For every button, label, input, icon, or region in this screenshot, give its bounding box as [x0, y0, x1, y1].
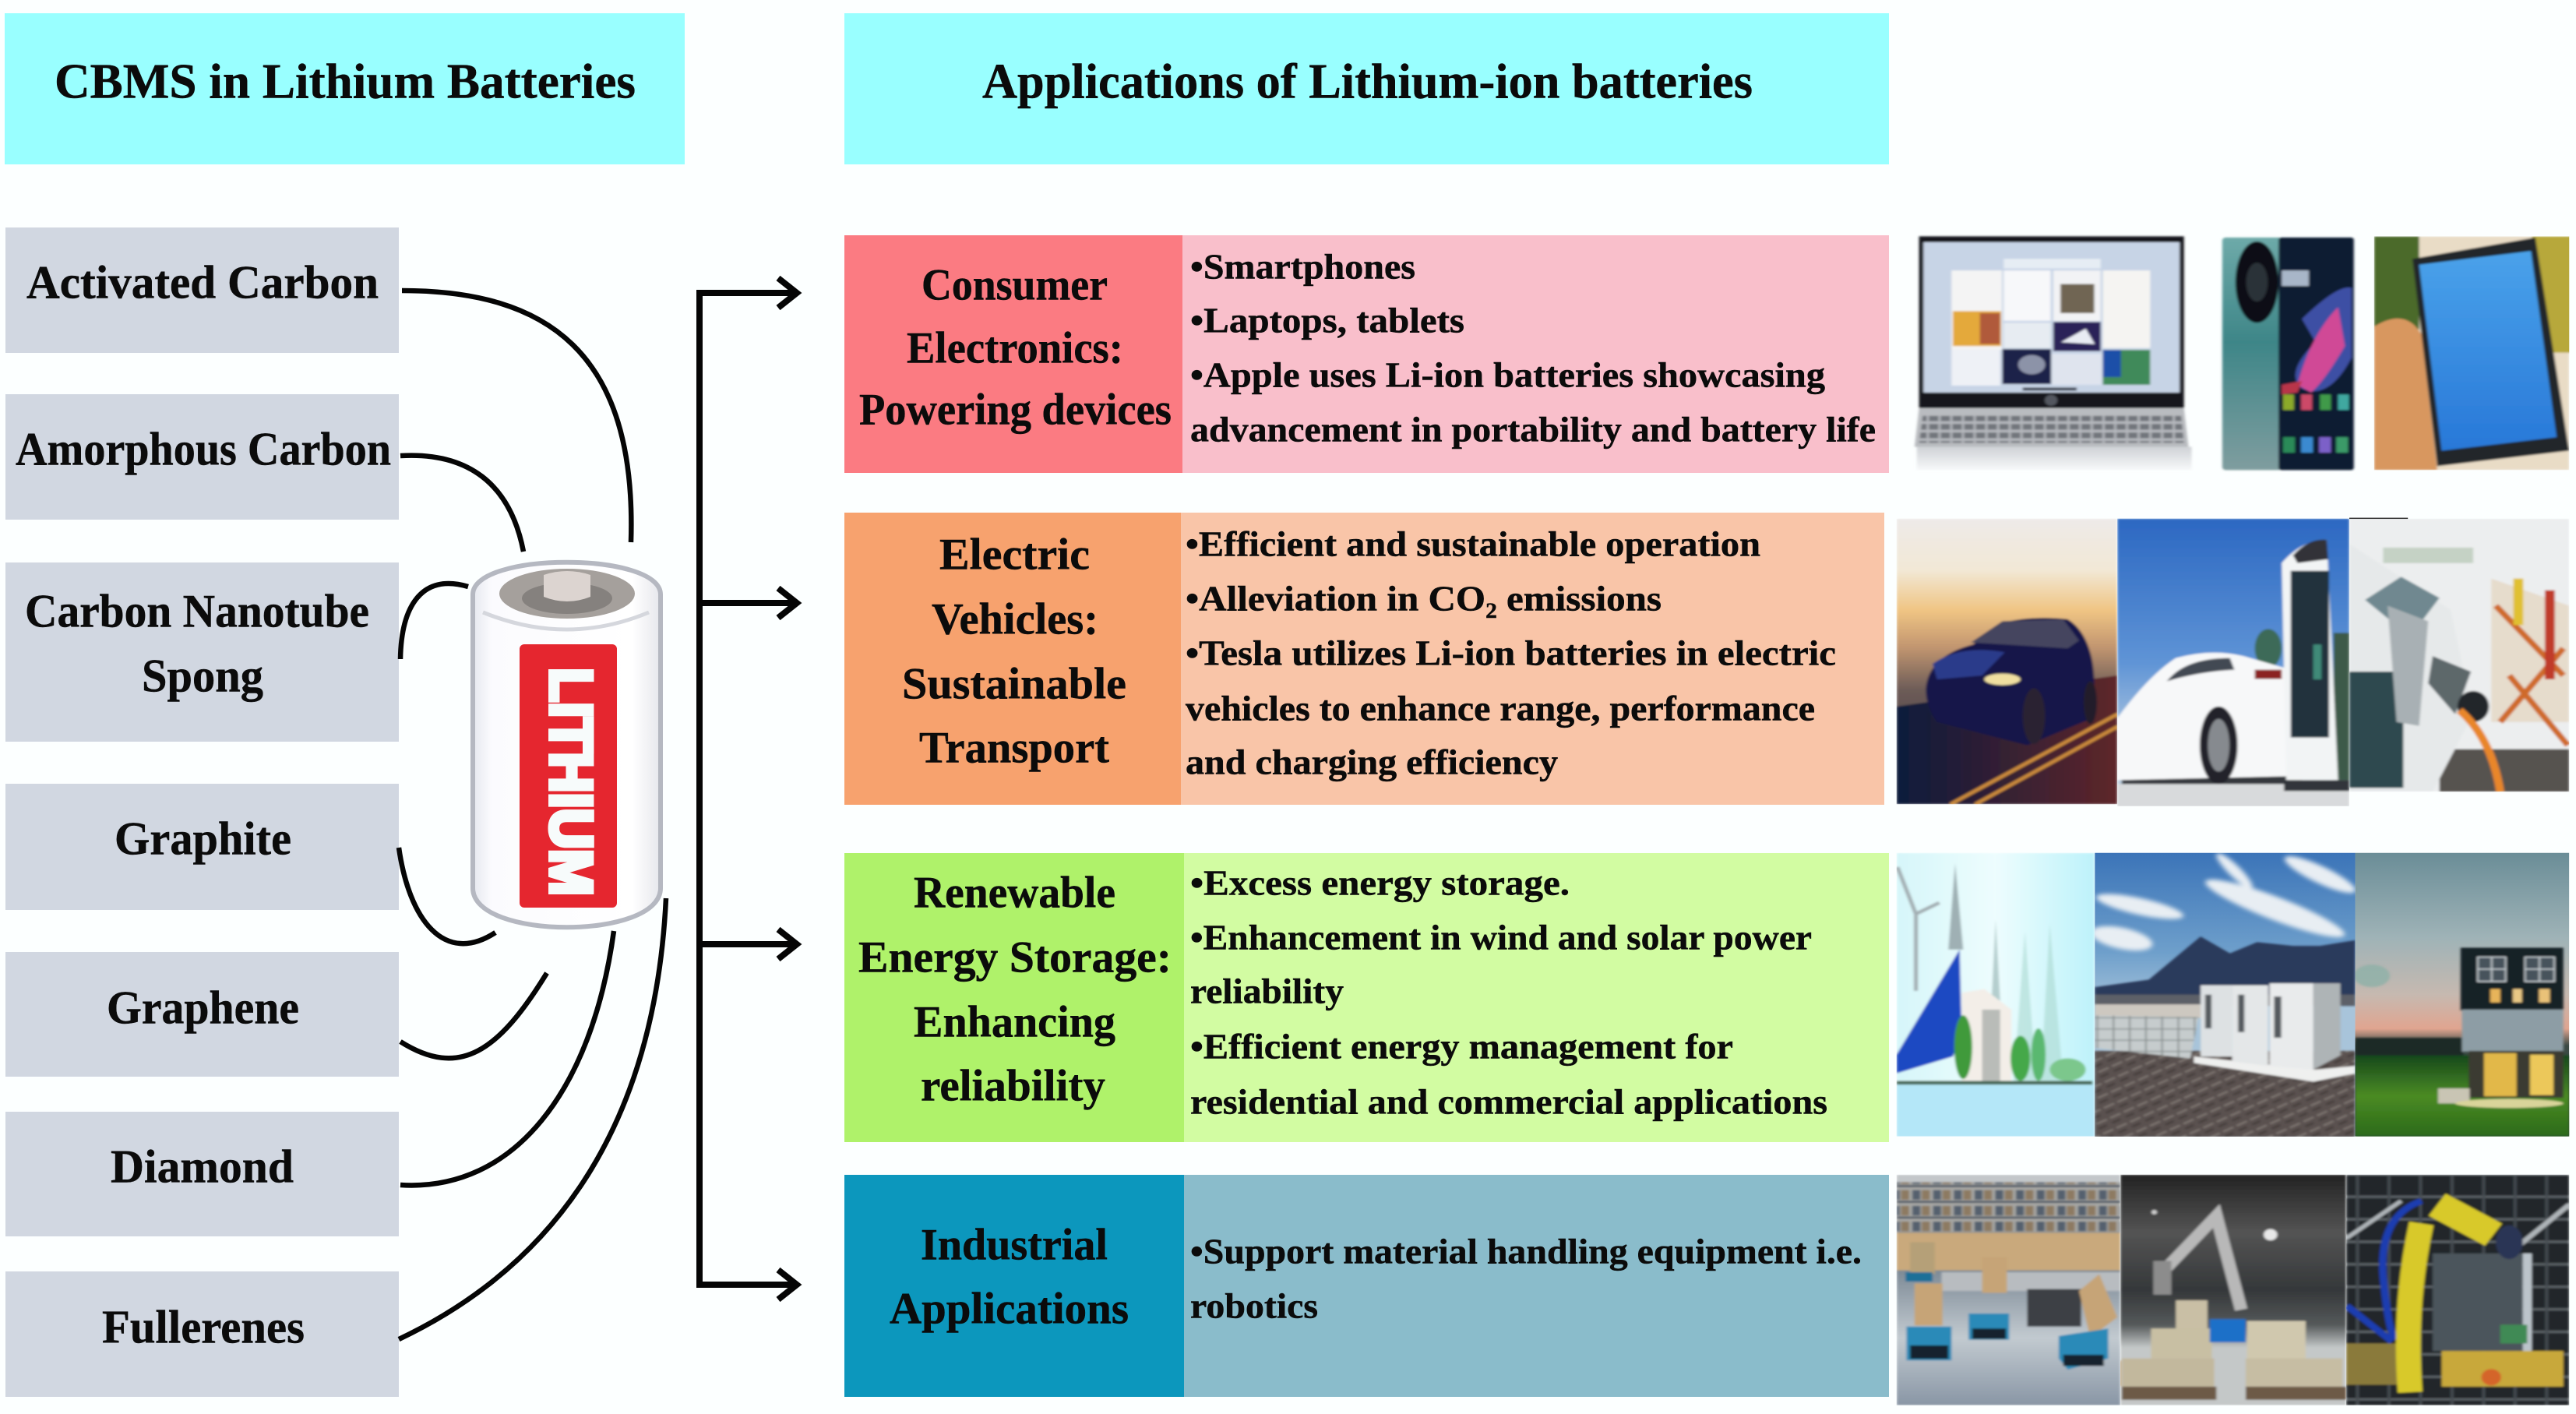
bullet list: renewable energy storage: •Excess energy storage. — [1190, 863, 1570, 902]
bullet list: renewable energy storage: •Efficient energy management for — [1190, 1027, 1733, 1066]
heading: industrial applications — [890, 1220, 1129, 1334]
material: Amorphous Carbon — [5, 394, 399, 520]
heading: electric vehicles: Transport — [919, 723, 1109, 773]
image: laptop — [1915, 236, 2192, 470]
heading: consumer electronics: Powering devices — [859, 385, 1172, 435]
material: Graphite — [5, 784, 399, 910]
bullet list: consumer electronics: •Laptops, tablets — [1190, 301, 1464, 340]
image: EV charging plug — [2349, 519, 2569, 792]
bullet list: electric vehicles: •Efficient and sustainable operation — [1186, 524, 1760, 564]
heading: electric vehicles: Vehicles: — [932, 595, 1098, 644]
heading: consumer electronics — [859, 260, 1172, 435]
material: Graphene — [5, 952, 399, 1077]
arrows: branching to application panels — [700, 278, 797, 1299]
bullet list: consumer electronics: •Smartphones — [1190, 246, 1415, 287]
material: Carbon Nanotube Spong: Carbon Nanotube — [25, 586, 369, 637]
decorative top edge line — [2349, 518, 2408, 519]
bullet list: renewable energy storage: residential and commercial applications — [1190, 1081, 1827, 1122]
panel: carbon material list — [5, 227, 399, 1397]
image: white car at charging station — [2117, 519, 2349, 807]
material: Diamond: Diamond — [111, 1141, 294, 1192]
header: Applications of Lithium-ion batteries — [844, 13, 1889, 164]
photo group: lower rows — [1897, 850, 2569, 1405]
heading: electric vehicles — [902, 530, 1126, 773]
bullet list: electric vehicles: and charging efficiency — [1186, 742, 1558, 782]
header: CBMS in Lithium Batteries: CBMS in Lithium Batteries — [55, 53, 636, 109]
icon: lithium battery: LITHIUM — [537, 668, 604, 896]
bullet list: renewable energy storage: reliability — [1190, 971, 1344, 1011]
bullet list: electric vehicles: vehicles to enhance range, performance — [1186, 689, 1815, 728]
material: Activated Carbon: Activated Carbon — [26, 257, 379, 309]
panel: renewable energy storage — [844, 853, 1889, 1142]
bullet list: consumer electronics — [1190, 246, 1876, 449]
panel: industrial applications — [844, 1175, 1889, 1397]
image: wind and solar grid illustration — [1897, 853, 2095, 1137]
heading: industrial applications: Applications — [890, 1284, 1129, 1334]
material: Graphite: Graphite — [115, 813, 291, 865]
photo group: upper rows — [1897, 236, 2572, 807]
panel: electric vehicles — [844, 513, 1884, 805]
material: Fullerenes — [5, 1271, 399, 1397]
material: Graphene: Graphene — [107, 982, 299, 1033]
heading: renewable energy storage: Enhancing — [914, 997, 1115, 1047]
heading: consumer electronics: Consumer — [922, 260, 1108, 310]
bullet list: renewable energy storage: •Enhancement in wind and solar power — [1190, 918, 1812, 957]
image: tablet held in hand — [2374, 236, 2572, 470]
bullet list: industrial applications: •Support material handling equipment i.e. — [1190, 1231, 1862, 1271]
bullet list: electric vehicles — [1186, 524, 1836, 782]
material: Carbon Nanotube Spong: Spong — [142, 650, 263, 701]
bullet list: electric vehicles: •Tesla utilizes Li-ion batteries in electric — [1186, 633, 1836, 673]
connector curves from materials to battery — [399, 291, 666, 1339]
material: Carbon Nanotube Spong — [5, 562, 399, 742]
bullet list: consumer electronics: advancement in portability and battery life — [1190, 410, 1876, 449]
heading: consumer electronics: Electronics: — [907, 324, 1123, 372]
header: CBMS in Lithium Batteries — [5, 13, 685, 164]
image: solar house at dusk — [2354, 853, 2569, 1137]
panel: consumer electronics — [844, 235, 1889, 473]
bullet list: industrial applications — [1190, 1231, 1862, 1326]
heading: industrial applications: Industrial — [921, 1220, 1108, 1270]
heading: electric vehicles: Sustainable — [902, 659, 1126, 709]
material: Fullerenes: Fullerenes — [102, 1301, 305, 1352]
material: Amorphous Carbon: Amorphous Carbon — [16, 424, 391, 475]
icon: lithium battery — [473, 562, 661, 927]
bullet list: renewable energy storage — [1190, 863, 1827, 1122]
header: Applications of Lithium-ion batteries: Applications of Lithium-ion batteries — [982, 53, 1753, 109]
image: yellow industrial robot arm — [2346, 1175, 2569, 1405]
material: Diamond — [5, 1112, 399, 1236]
image: palletizing robot arm — [2120, 1175, 2346, 1405]
bullet list: electric vehicles: •Alleviation in CO₂ emissions — [1186, 578, 1662, 619]
image: battery storage with mountains — [2088, 850, 2360, 1137]
image: smartphone — [2222, 238, 2354, 470]
heading: renewable energy storage: reliability — [921, 1061, 1105, 1111]
bullet list: consumer electronics: •Apple uses Li-ion batteries showcasing — [1190, 355, 1825, 394]
bullet list: industrial applications: robotics — [1190, 1285, 1318, 1326]
material: Activated Carbon — [5, 227, 399, 353]
heading: renewable energy storage: Renewable — [914, 868, 1115, 918]
heading: renewable energy storage — [858, 868, 1172, 1111]
heading: electric vehicles: Electric — [939, 530, 1090, 580]
image: blue electric car at sunset — [1897, 519, 2117, 804]
heading: renewable energy storage: Energy Storage: — [858, 933, 1172, 982]
image: warehouse robots with parcels — [1897, 1175, 2120, 1405]
